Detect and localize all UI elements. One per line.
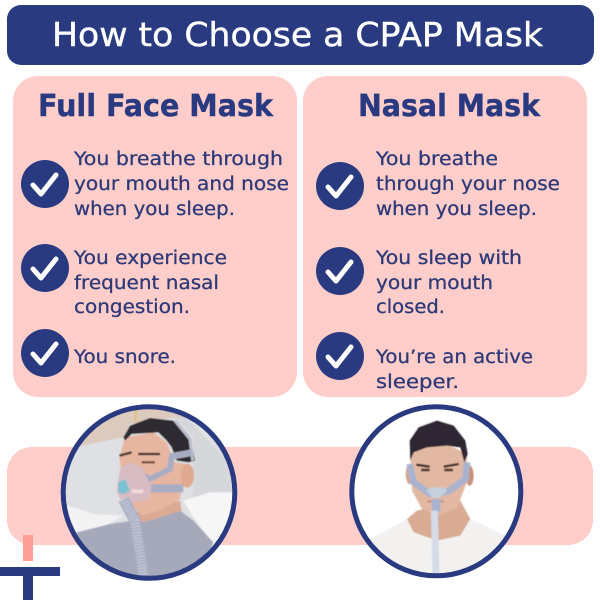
bottom pink band (7, 447, 593, 545)
check item: mouth closed: You sleep with (375, 248, 522, 269)
check item: mouth closed: closed. (376, 297, 445, 318)
check item: active sleeper: You’re an active (375, 347, 533, 368)
check item: active sleeper (316, 332, 533, 393)
heading: full face mask: Full Face Mask (38, 89, 274, 124)
check item: active sleeper: sleeper. (376, 372, 459, 393)
check item: breathe through nose (316, 149, 560, 220)
photo: man wearing nasal mask (352, 407, 521, 584)
check item: snore: You snore. (73, 347, 176, 368)
check item: breathe through mouth and nose: when you sleep. (74, 199, 235, 220)
check item: mouth closed (316, 247, 522, 318)
logo mark (0, 535, 60, 600)
title banner (7, 5, 594, 65)
heading: nasal mask: Nasal Mask (358, 89, 541, 124)
photo: man wearing full face mask (60, 404, 240, 584)
check item: nasal congestion: congestion. (74, 297, 190, 318)
check item: snore (21, 329, 176, 377)
check item: breathe through nose: when you sleep. (376, 199, 537, 220)
check item: breathe through nose: through your nose (376, 174, 560, 195)
title banner: How to Choose a CPAP Mask (52, 15, 544, 54)
check item: breathe through mouth and nose: You breathe through (73, 149, 283, 170)
check item: nasal congestion: frequent nasal (74, 273, 219, 294)
check item: breathe through mouth and nose (21, 149, 289, 220)
check item: nasal congestion: You experience (73, 248, 227, 269)
check item: nasal congestion (21, 244, 227, 318)
panel: nasal mask (303, 76, 587, 397)
check item: breathe through nose: You breathe (375, 149, 498, 170)
check item: breathe through mouth and nose: your mouth and nose (74, 174, 289, 195)
panel: full face mask (13, 76, 297, 397)
check item: mouth closed: your mouth (376, 273, 493, 294)
